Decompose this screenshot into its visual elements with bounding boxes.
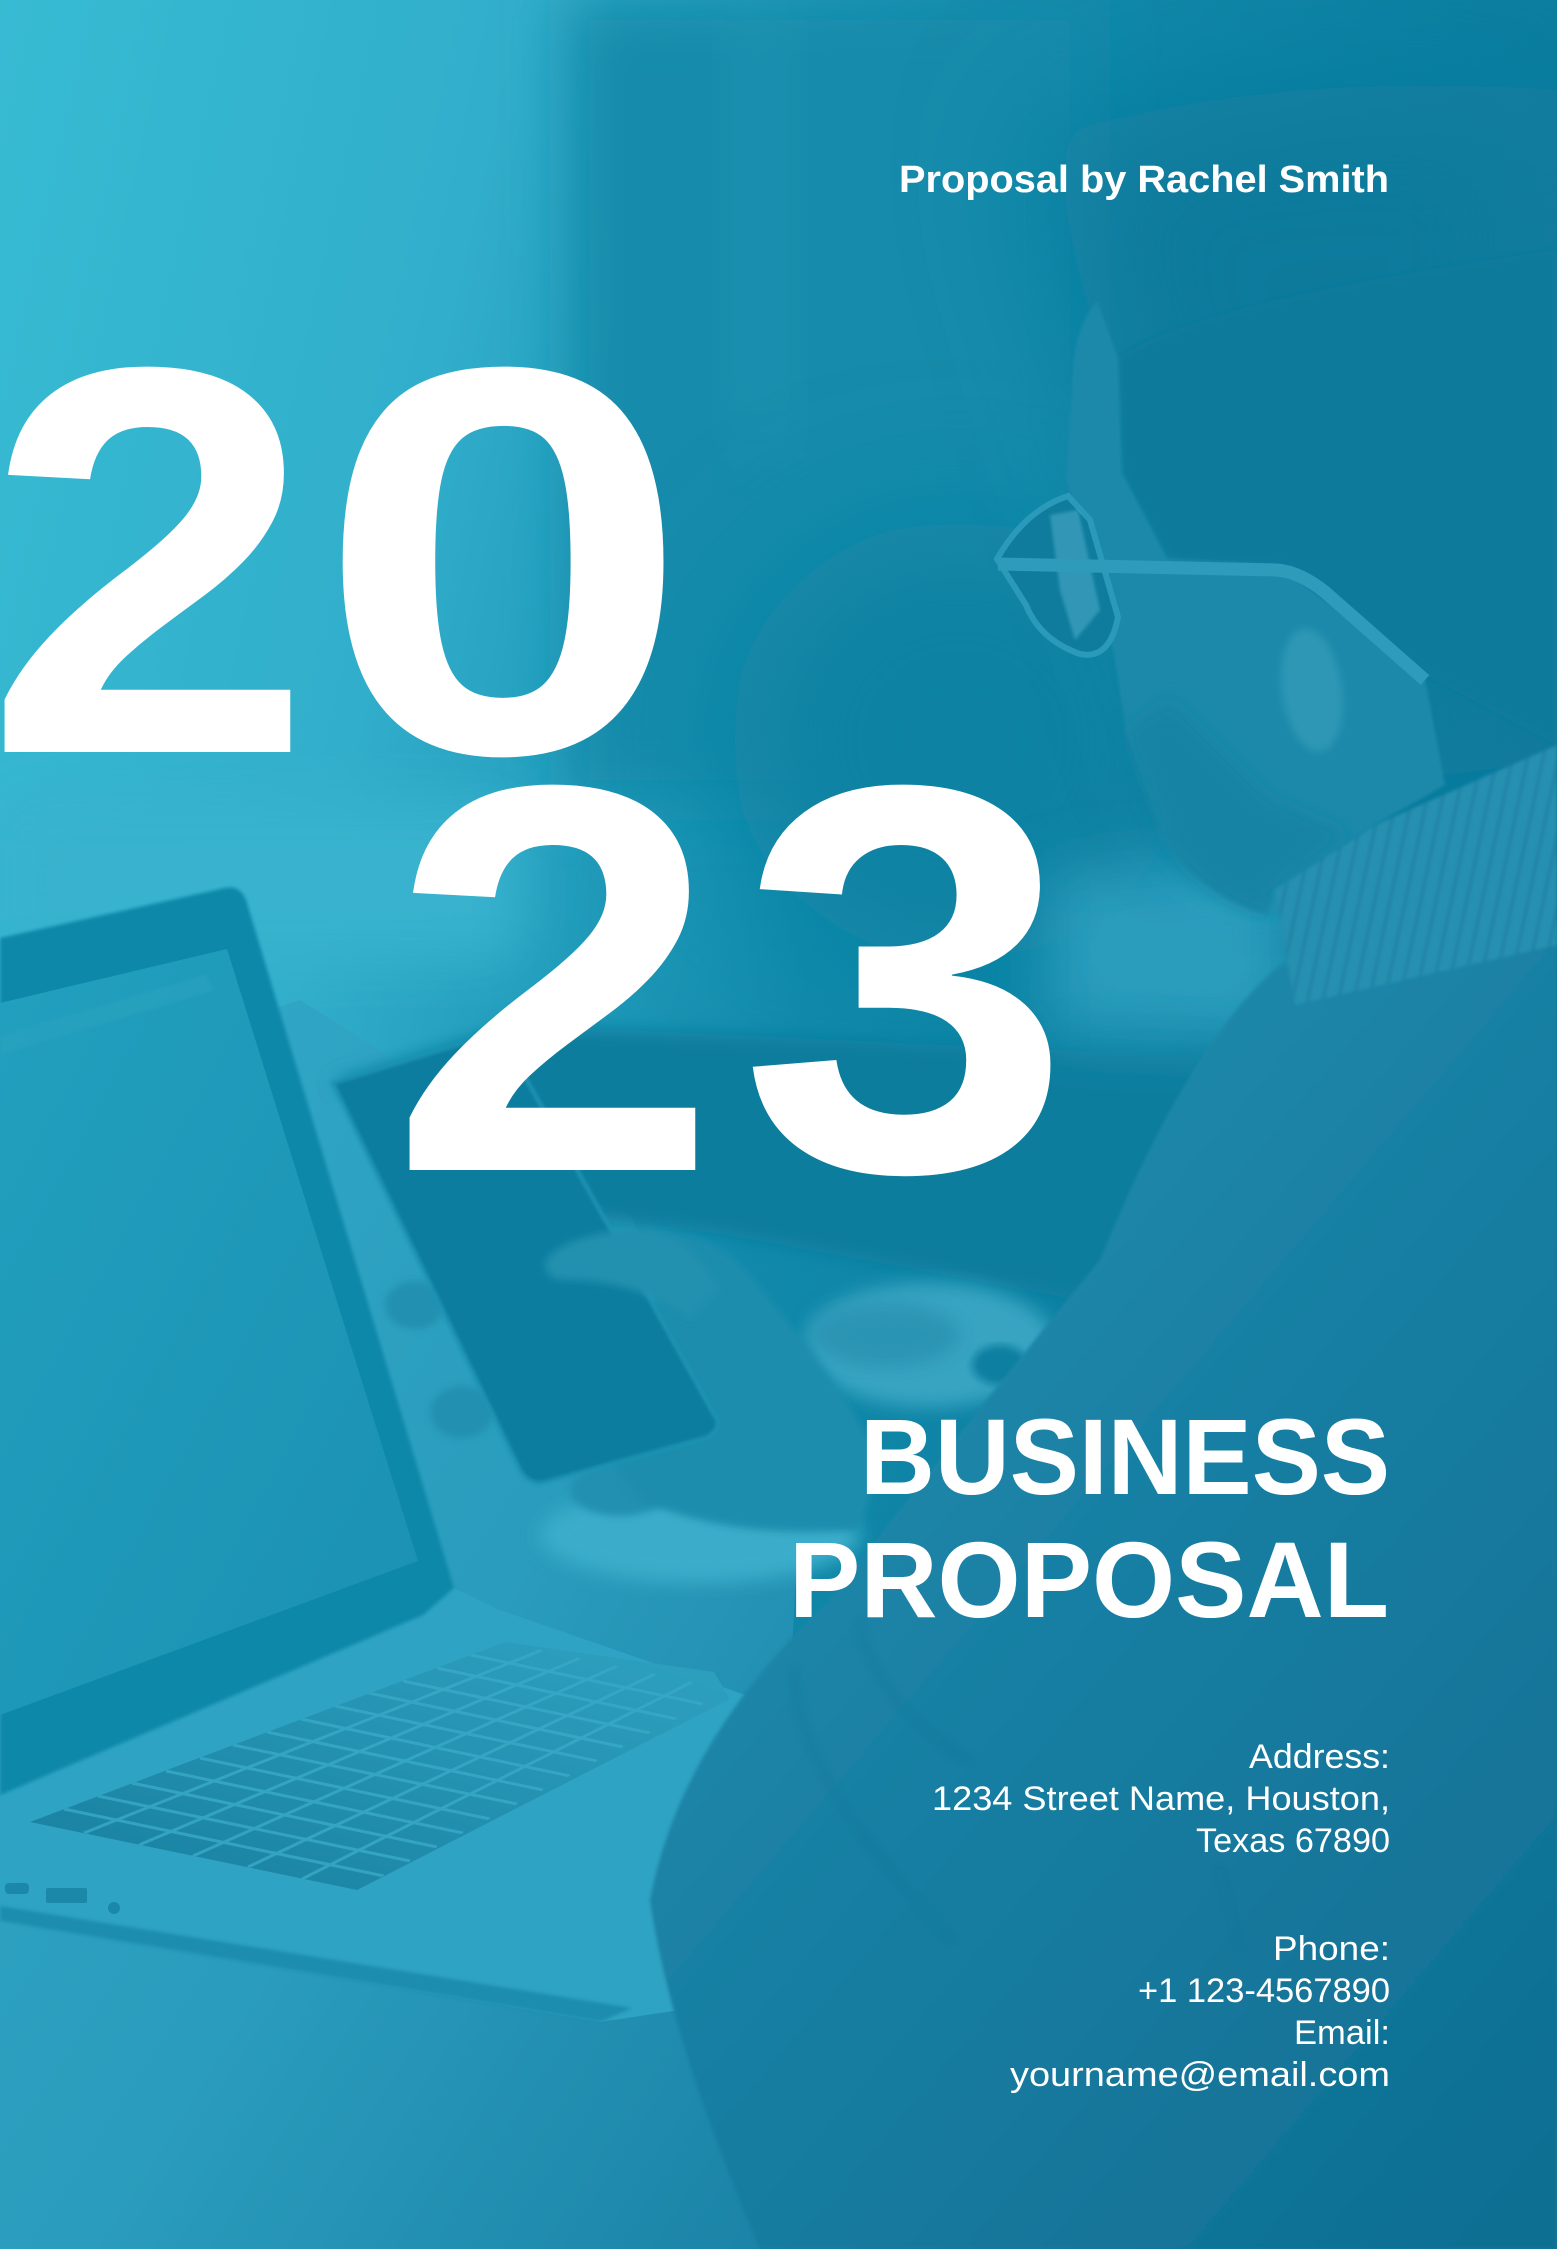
address block: Address:	[1249, 1738, 1390, 1776]
saucer and cup	[540, 1283, 1055, 1583]
year: 23: 3	[739, 672, 1072, 1288]
address block: Texas 67890	[1196, 1822, 1390, 1860]
man: sweater	[650, 920, 1557, 2249]
man: sweater folds	[795, 1619, 1241, 1954]
man: face	[1066, 301, 1445, 915]
background photo: lower table surface	[0, 1000, 800, 2249]
laptop base	[0, 1588, 790, 2022]
contact block: Email:	[1294, 2014, 1390, 2052]
background photo: light table band	[1050, 850, 1290, 1040]
man: glasses	[997, 496, 1425, 680]
laptop bezel	[0, 888, 454, 1795]
man: beard	[1126, 700, 1350, 915]
contact block: yourname@email.com	[1010, 2056, 1390, 2094]
laptop ports	[5, 1883, 120, 1914]
phone	[333, 1032, 718, 1483]
laptop keyboard	[30, 1642, 730, 1890]
background photo: blurred cafe interior	[0, 0, 1190, 960]
contact block	[1010, 1930, 1390, 2094]
year: 23	[389, 671, 1072, 1288]
year: 20: 0	[316, 252, 691, 869]
laptop screen	[0, 949, 418, 1715]
thumb over phone	[545, 1228, 720, 1320]
contact block: Phone:	[1273, 1930, 1390, 1968]
background photo: dark area behind the hand	[333, 1025, 1290, 1340]
year: 23: 2	[389, 671, 719, 1288]
contact block: +1 123-4567890	[1138, 1972, 1390, 2010]
hand fingers	[385, 1281, 670, 1516]
byline: Proposal by Rachel Smith	[899, 159, 1389, 201]
man: hair core	[1118, 250, 1557, 745]
laptop	[0, 888, 790, 2022]
man: ear	[1274, 624, 1350, 756]
title	[789, 1396, 1390, 1640]
title: PROPOSAL	[789, 1519, 1389, 1640]
address block	[932, 1738, 1390, 1860]
year: 20	[0, 252, 691, 870]
hand	[600, 1230, 880, 1532]
man: hair and head back	[1040, 86, 1557, 800]
man: sweater collar	[1275, 745, 1557, 1005]
title: BUSINESS	[860, 1396, 1390, 1517]
address block: 1234 Street Name, Houston,	[932, 1780, 1390, 1818]
